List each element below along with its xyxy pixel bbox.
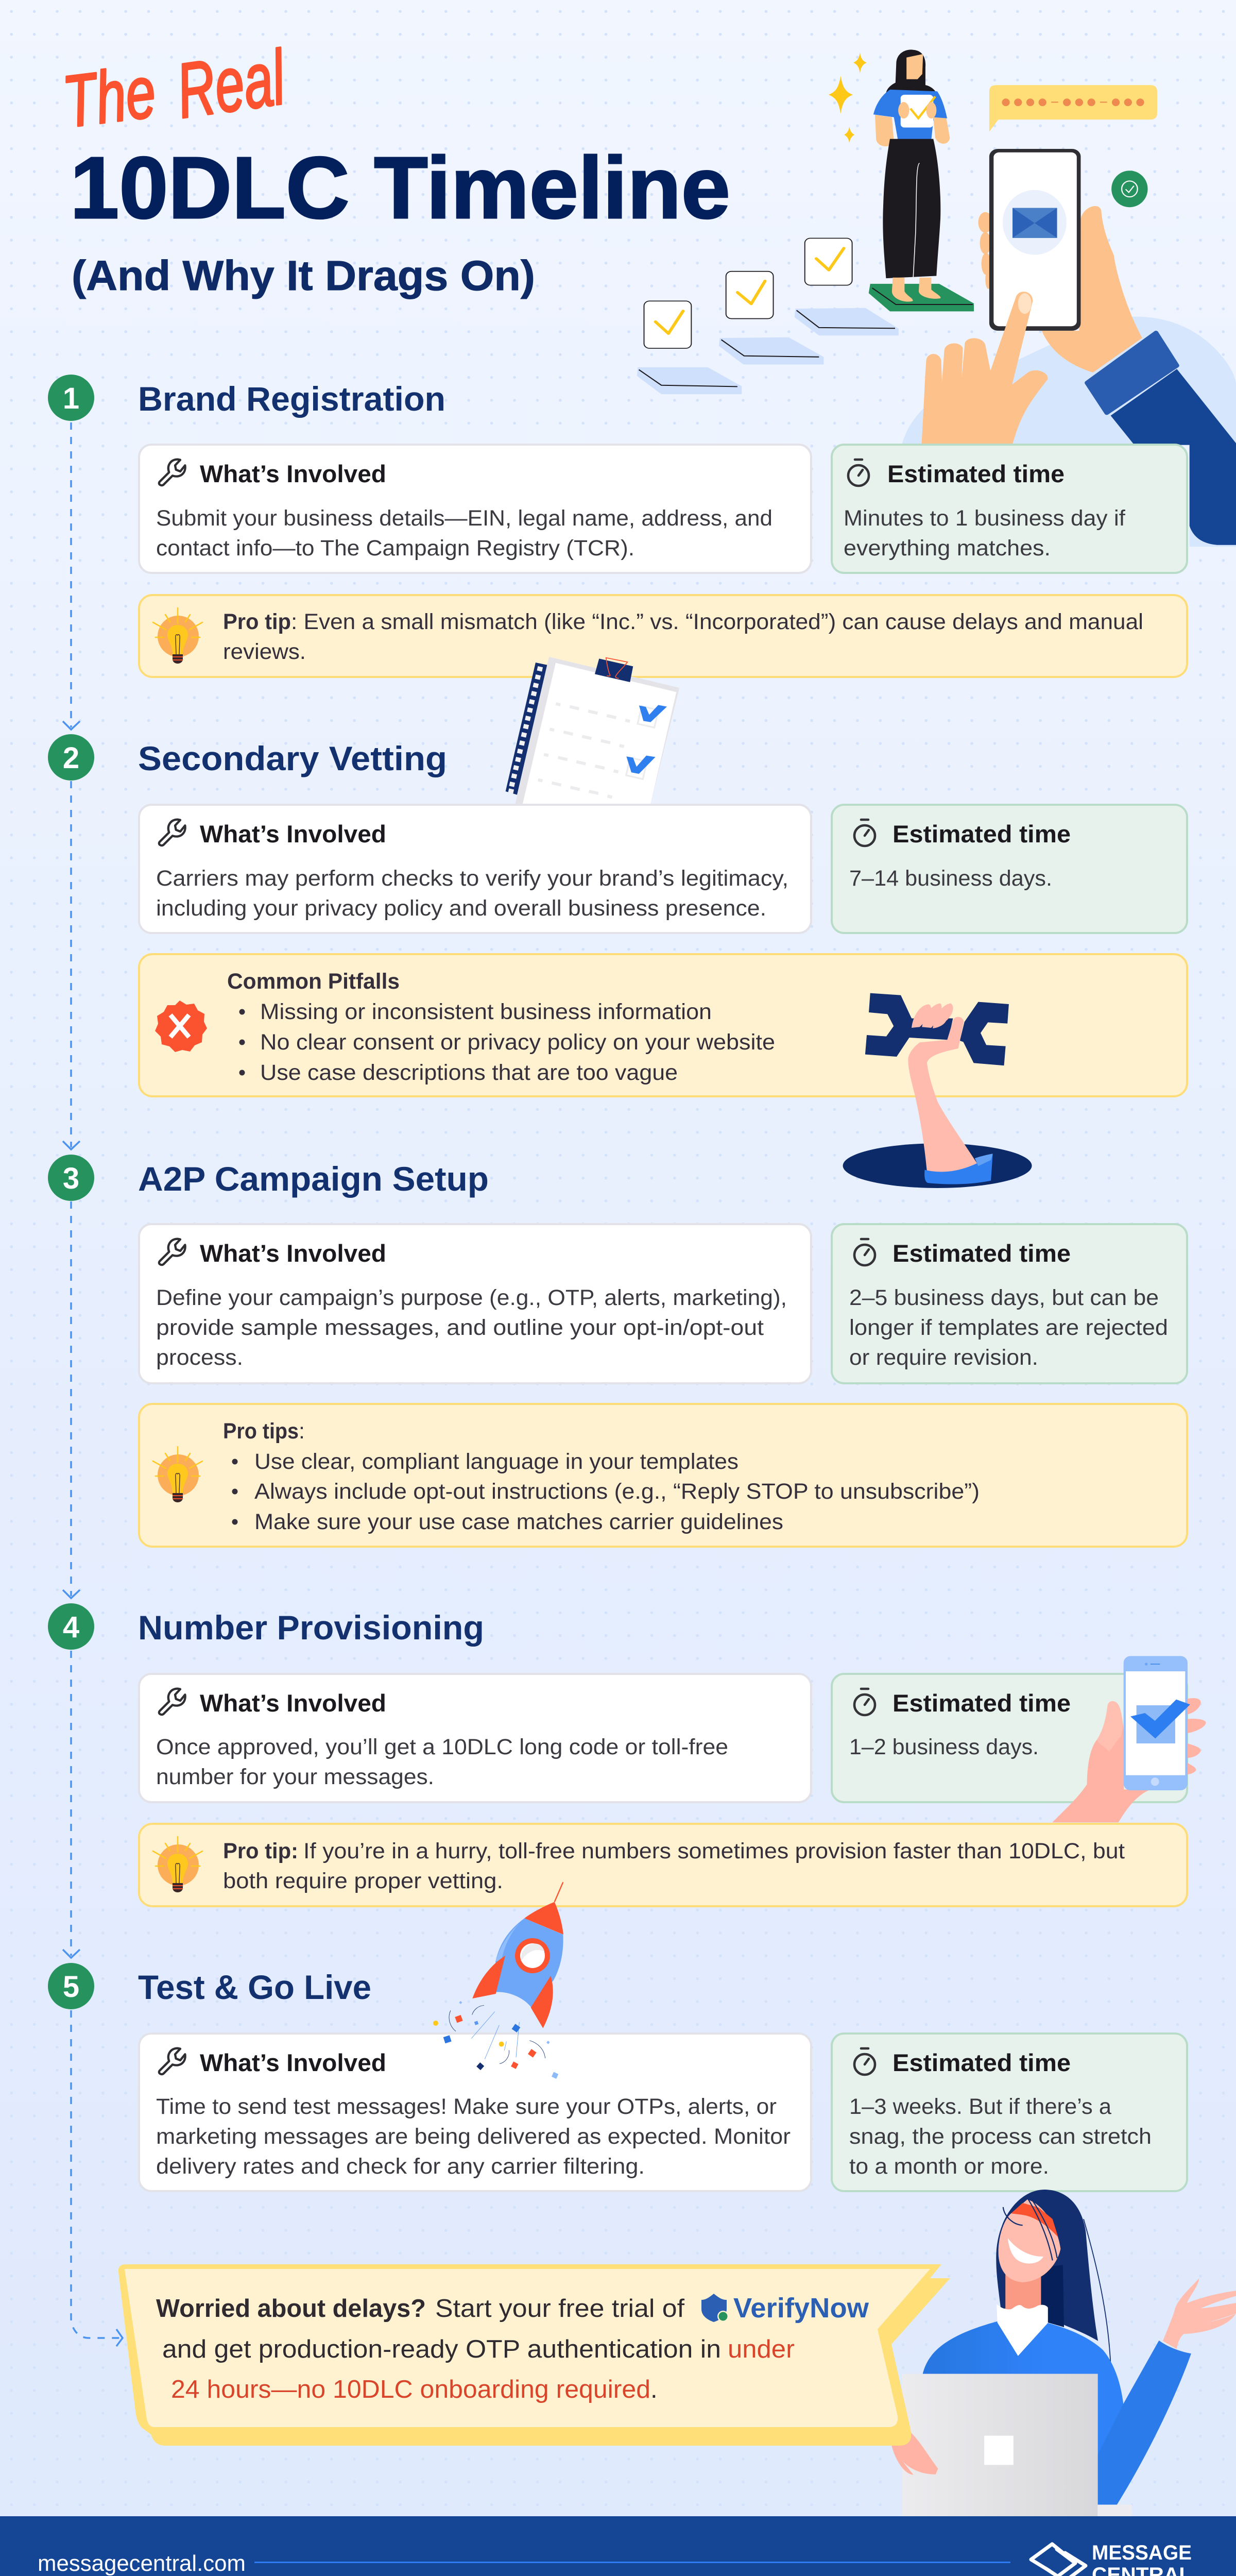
callout: worried about delays [118,2264,950,2446]
card body: snag, the process can stretch [849,2124,1152,2149]
card body [156,1285,787,1370]
card body [156,2094,791,2179]
illustration: woman with laptop [891,2190,1236,2516]
card heading: Estimated time [892,1240,1071,1267]
card body: or require revision. [849,1345,1038,1370]
card body [156,1735,728,1789]
panel: pro tip [139,1824,1187,1906]
card body: provide sample messages, and outline your opt-in/opt-out [156,1315,764,1340]
icon: red badge with X [155,1001,207,1052]
card body: Once approved, you’ll get a 10DLC long code or toll-free [156,1735,728,1759]
card heading: Estimated time [892,1689,1071,1717]
step badge 4 [48,1603,94,1650]
card body: everything matches. [844,536,1051,561]
subtitle: (And Why It Drags On) [72,252,535,299]
illustration: rocket with confetti [433,1882,563,2079]
card body: process. [156,1345,243,1370]
icon: wrench [159,1239,185,1265]
sleeve [1087,333,1236,545]
title: The Real: The [59,50,160,143]
icon: timer [854,820,875,846]
card body: marketing messages are being delivered as expected. Monitor [156,2124,791,2149]
tip text: reviews. [223,639,306,664]
step badge 5 [48,1963,94,2009]
card body [849,1285,1168,1370]
card heading: What’s Involved [200,820,386,848]
section 2: Secondary Vetting [48,734,1187,1096]
heading: Secondary Vetting: Secondary Vetting [138,739,447,777]
icon: timer [854,1239,875,1265]
heading: Test & Go Live: Test & Go Live [138,1968,371,2006]
logo wordmark: MESSAGE [1092,2541,1192,2564]
card heading: Estimated time [892,2049,1071,2076]
pro tips list [232,1449,980,1534]
step badge 1: 1 [63,382,79,415]
section 4: Number Provisioning [48,1603,1206,1906]
icon: light bulb [153,608,202,664]
card body: delivery rates and check for any carrier filtering. [156,2154,645,2179]
card heading: What’s Involved [200,2049,386,2076]
step badge 1 [48,375,94,421]
footer rule [254,2562,1010,2563]
card body: Define your campaign’s purpose (e.g., OTP, alerts, marketing), [156,1285,787,1310]
pro tips heading: : [299,1419,305,1444]
card body: 1–3 weeks. But if there’s a [849,2094,1111,2119]
panel: what's involved [139,445,811,573]
pro tips list: Always include opt-out instructions (e.g., “Reply STOP to unsubscribe”) [254,1479,980,1504]
panel: estimated time [832,445,1187,573]
card body: Time to send test messages! Make sure your OTPs, alerts, or [156,2094,777,2119]
timeline: dashed connector [63,422,123,2346]
footer bar [0,2516,1236,2576]
card body: 2–5 business days, but can be [849,1285,1159,1310]
card heading: What’s Involved [200,1240,386,1267]
heading: Brand Registration: Brand Registration [138,380,445,418]
tip text: If you’re in a hurry, toll-free numbers sometimes provision faster than 10DLC, but [303,1839,1125,1863]
callout line 3: 24 hours—no 10DLC onboarding required [171,2376,650,2403]
tip text: : Even a small mismatch (like “Inc.” vs. “Incorporated”) can cause delays and manual [291,609,1143,634]
pitfalls list: No clear consent or privacy policy on your website [260,1030,775,1055]
speech bubble with code [989,85,1157,132]
logo wordmark [1092,2541,1192,2576]
panel: what's involved [139,1674,811,1802]
card heading: Estimated time [892,820,1071,848]
tip text: Pro tip: [223,1839,298,1863]
pitfalls heading: Common Pitfalls [227,969,400,994]
section 5: Test & Go Live [48,1963,1187,2191]
tip text [223,609,1143,664]
card body: to a month or more. [849,2154,1049,2179]
icon: VerifyNow shield [701,2294,729,2322]
callout line 3: . [650,2376,658,2403]
pro tips heading: Pro tips [223,1419,299,1444]
light blue blob [902,317,1236,547]
pitfalls list: Use case descriptions that are too vague [260,1060,678,1085]
pro tips list: Make sure your use case matches carrier guidelines [254,1510,783,1534]
panel: what's involved [139,2033,811,2191]
phone with envelope [989,149,1080,331]
panel: what's involved [139,1224,811,1383]
card heading: Estimated time [887,460,1065,487]
card body: Minutes to 1 business day if [844,506,1126,531]
icon: light bulb [153,1837,202,1892]
card body: including your privacy policy and overall business presence. [156,896,766,921]
panel: estimated time [832,1674,1187,1802]
pitfalls list: Missing or inconsistent business information [260,999,712,1024]
panel: pro tip [139,595,1187,677]
heading: A2P Campaign Setup: A2P Campaign Setup [138,1160,489,1198]
logo mark [1031,2544,1086,2576]
step badge 5: 5 [63,1970,79,2004]
icon: timer [854,1689,875,1715]
footer url: messagecentral.com [38,2551,246,2576]
hand behind phone [978,206,1142,372]
panel: estimated time [832,2033,1187,2191]
callout line 1: Worried about delays? [156,2295,426,2323]
woman figure [873,49,950,302]
card body [844,506,1126,561]
step badge 2: 2 [63,741,79,775]
tip text [223,1839,1125,1893]
illustration: notebook checklist [506,657,679,804]
title: 10DLC Timeline: 10DLC Timeline [70,139,730,237]
step badge 3: 3 [63,1162,79,1195]
icon: wrench [159,2048,185,2074]
heading: Number Provisioning: Number Provisioning [138,1608,484,1647]
card body: 7–14 business days. [849,866,1052,891]
illustration: arm with wrench from hole [843,993,1032,1188]
step badge 2 [48,734,94,781]
panel: what's involved [139,805,811,933]
green step tile [869,284,974,311]
section 3: A2P Campaign Setup [48,1155,1187,1547]
icon: wrench [159,460,185,485]
pointing hand [921,292,1048,445]
section 1: Brand Registration [48,375,1187,677]
callout line 2: under [728,2335,795,2363]
card body [156,866,788,921]
icon: wrench [159,820,185,845]
callout line 1 [156,2295,684,2323]
title block [59,33,730,299]
card body: longer if templates are rejected [849,1315,1168,1340]
icon: wrench [159,1689,185,1715]
card body [156,506,772,561]
card heading: What’s Involved [200,460,386,487]
icon: green check badge [1111,171,1148,207]
step badge 3 [48,1155,94,1201]
panel: estimated time [832,805,1187,933]
pro tips list: Use clear, compliant language in your templates [254,1449,739,1474]
callout line 1: Start your free trial of [435,2295,684,2323]
card body: number for your messages. [156,1765,434,1789]
title: The Real [59,33,291,143]
icon: sparkles [829,53,867,143]
tip text: Pro tip [223,609,291,634]
panel: pro tips [139,1404,1187,1547]
callout ribbon [118,2264,950,2446]
title: The Real: Real [171,33,291,134]
icon: timer [848,460,869,486]
blue step tiles [637,308,899,394]
icon: light bulb [153,1447,202,1502]
card body [849,2094,1152,2179]
card body: 1–2 business days. [849,1735,1039,1759]
illustration: woman, steps and phone in hand [637,49,1236,547]
panel: estimated time [832,1224,1187,1383]
check boxes [644,238,852,348]
step badge 4: 4 [63,1611,79,1644]
icon: timer [854,2048,875,2075]
card body: Carriers may perform checks to verify your brand’s legitimacy, [156,866,788,891]
panel: common pitfalls [139,954,1187,1096]
callout line 2: and get production-ready OTP authentication in [162,2335,721,2363]
card body: Submit your business details—EIN, legal name, address, and [156,506,772,531]
illustration: hand holding phone [1052,1656,1206,1822]
card body: contact info—to The Campaign Registry (TCR). [156,536,634,561]
VerifyNow logo text: VerifyNow [733,2293,869,2324]
pitfalls list [239,999,775,1085]
tip text: both require proper vetting. [223,1869,503,1893]
card heading: What’s Involved [200,1689,386,1717]
